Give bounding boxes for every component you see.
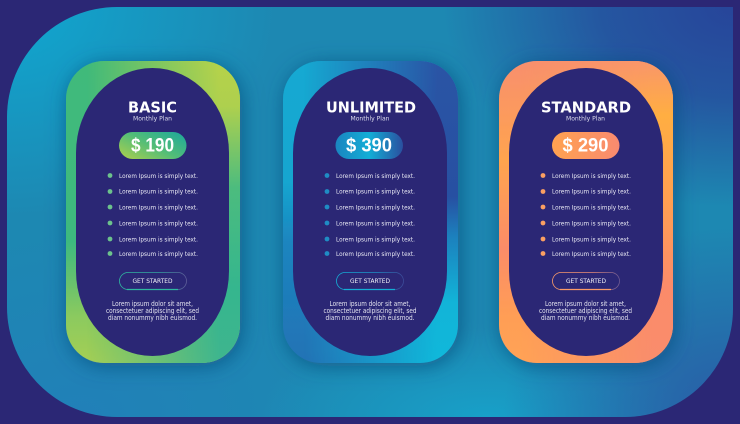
feature list: Lorem Ipsum is simply text. [336, 220, 415, 228]
feature list: Lorem Ipsum is simply text. [336, 250, 415, 258]
description: diam nonummy nibh euismod. [326, 314, 414, 322]
price pill [336, 132, 403, 159]
description: consectetuer adipiscing elit, sed [324, 307, 416, 315]
card: basic [66, 61, 240, 363]
description [324, 300, 416, 322]
feature list: Lorem Ipsum is simply text. [119, 236, 198, 244]
description: diam nonummy nibh euismod. [541, 314, 630, 322]
feature list: Lorem Ipsum is simply text. [336, 204, 415, 212]
feature list: Lorem Ipsum is simply text. [336, 236, 415, 244]
button: get started: GET STARTED [350, 279, 391, 285]
feature list: Lorem Ipsum is simply text. [552, 172, 631, 180]
description [539, 300, 632, 322]
card frame [66, 61, 240, 363]
description: Lorem ipsum dolor sit amet, [112, 300, 193, 308]
feature list [325, 172, 415, 258]
card: standard [499, 61, 673, 363]
card frame [499, 61, 673, 363]
button: get started [336, 272, 404, 290]
feature list: Lorem Ipsum is simply text. [119, 172, 198, 180]
button: get started: GET STARTED [132, 279, 173, 285]
description: Lorem ipsum dolor sit amet, [545, 300, 626, 308]
inner panel [509, 68, 663, 356]
feature list: Lorem Ipsum is simply text. [119, 204, 198, 212]
feature list: Lorem Ipsum is simply text. [336, 188, 415, 196]
description: diam nonummy nibh euismod. [108, 314, 197, 322]
price pill: $ 290 [562, 136, 608, 156]
price pill [552, 132, 620, 159]
description: Lorem ipsum dolor sit amet, [330, 300, 410, 308]
feature list: Lorem Ipsum is simply text. [552, 188, 631, 196]
description [106, 300, 199, 322]
feature list: Lorem Ipsum is simply text. [552, 236, 631, 244]
plan title: BASIC [128, 98, 177, 116]
plan title: UNLIMITED [326, 98, 416, 116]
feature list: Lorem Ipsum is simply text. [119, 250, 198, 258]
card: unlimited [283, 61, 458, 363]
feature list [108, 172, 198, 258]
feature list: Lorem Ipsum is simply text. [119, 188, 198, 196]
plan title: STANDARD [541, 98, 631, 116]
feature list: Lorem Ipsum is simply text. [552, 220, 631, 228]
button: get started [552, 272, 620, 290]
feature list: Lorem Ipsum is simply text. [552, 250, 631, 258]
price pill: $ 390 [346, 136, 392, 156]
feature list: Lorem Ipsum is simply text. [552, 204, 631, 212]
button: get started [120, 272, 186, 290]
price pill [119, 132, 186, 159]
feature list: Lorem Ipsum is simply text. [336, 172, 415, 180]
plan subtitle: Monthly Plan [566, 116, 605, 122]
inner panel [76, 68, 229, 356]
price pill: $ 190 [131, 136, 174, 156]
description: consectetuer adipiscing elit, sed [539, 307, 632, 315]
plan subtitle: Monthly Plan [133, 116, 172, 122]
inner panel [293, 68, 447, 356]
description: consectetuer adipiscing elit, sed [106, 307, 199, 315]
card frame [283, 61, 458, 363]
pricing cards [58, 54, 684, 376]
button: get started: GET STARTED [566, 279, 607, 285]
feature list [541, 172, 631, 258]
plan subtitle: Monthly Plan [350, 116, 390, 122]
feature list: Lorem Ipsum is simply text. [119, 220, 198, 228]
